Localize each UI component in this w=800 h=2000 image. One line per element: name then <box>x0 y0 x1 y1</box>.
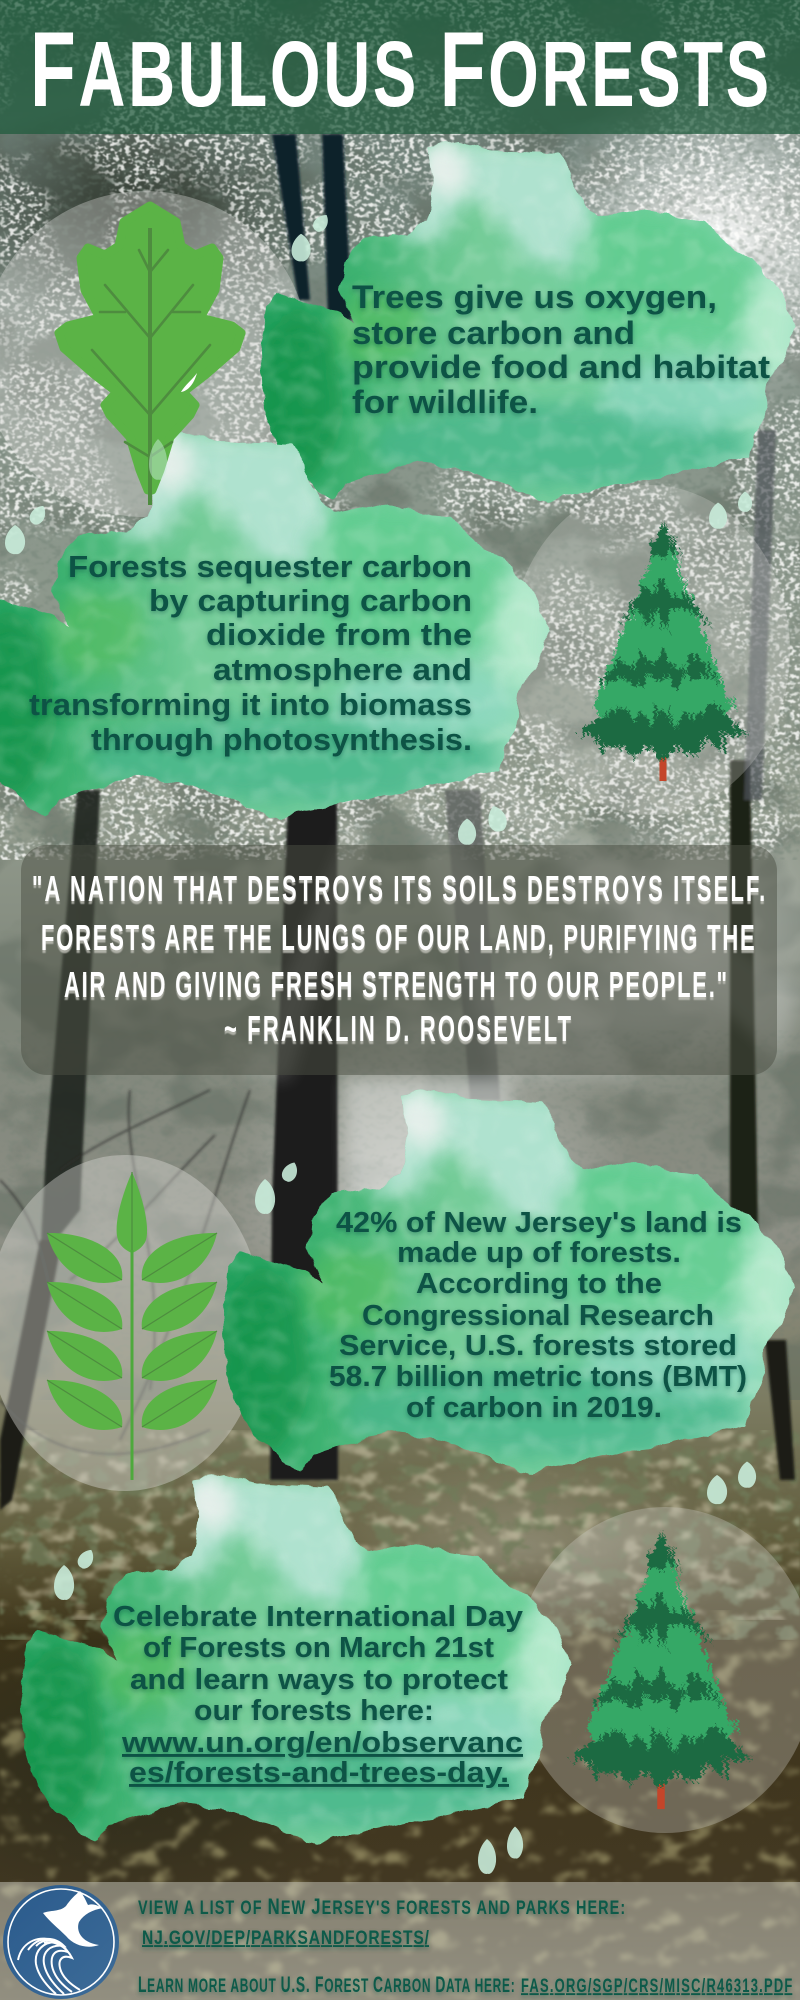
text block: new jersey forests: Service, U.S. forests stored <box>339 1330 737 1362</box>
quote text <box>32 870 765 1049</box>
text block: trees give us oxygen: Trees give us oxygen, <box>352 279 717 315</box>
icon: pine tree large <box>571 1532 751 1809</box>
text block: international day of forests: www.un.org/en/observanc <box>121 1727 523 1759</box>
icons: small falling leaves <box>5 211 756 1874</box>
text block: forests sequester carbon: transforming it into biomass <box>29 687 472 722</box>
text block: new jersey forests: 42% of New Jersey's land is <box>336 1207 742 1239</box>
icon: oak leaf <box>59 206 241 505</box>
icon: pine tree <box>579 522 747 781</box>
text block: new jersey forests: 58.7 billion metric tons (BMT) <box>329 1361 747 1393</box>
footer text: forest carbon data: FAS.ORG/SGP/CRS/MISC/R46313.PDF <box>521 1976 792 1997</box>
circle behind pine tree <box>510 485 790 815</box>
footer text: list of forests and parks <box>138 1895 625 1948</box>
text block: new jersey forests: Congressional Research <box>362 1300 714 1332</box>
circle behind ash leaf <box>0 1155 263 1491</box>
quote text: ~ FRANKLIN D. ROOSEVELT <box>224 1010 571 1049</box>
text block: trees give us oxygen: provide food and habitat <box>352 349 770 385</box>
text block: new jersey forests: of carbon in 2019. <box>406 1392 662 1424</box>
footer text: forest carbon data: LEARN MORE ABOUT U.S. FOREST CARBON DATA HERE: <box>138 1972 515 1997</box>
text block: trees give us oxygen <box>352 279 770 420</box>
icon: ash leaf <box>47 1172 217 1480</box>
text block: new jersey forests <box>329 1207 747 1424</box>
text block: international day of forests <box>113 1601 523 1789</box>
panel: quote background <box>21 845 777 1075</box>
text block: trees give us oxygen: store carbon and <box>352 315 635 351</box>
panel: watercolor blob 3 <box>211 1083 800 1483</box>
text block: forests sequester carbon: dioxide from the <box>206 617 472 652</box>
text block: international day of forests: es/forests-and-trees-day. <box>129 1757 509 1789</box>
footer text: list of forests and parks: VIEW A LIST OF NEW JERSEY'S FORESTS AND PARKS HERE: <box>138 1895 625 1920</box>
quote text: "A NATION THAT DESTROYS ITS SOILS DESTROYS ITSELF. <box>32 870 765 909</box>
title band <box>0 0 800 134</box>
text block: new jersey forests: According to the <box>416 1268 662 1300</box>
icon: NJDEP seal <box>3 1885 119 1999</box>
footer band <box>0 1882 800 2000</box>
text block: forests sequester carbon: Forests sequester carbon <box>68 549 472 584</box>
text block: new jersey forests: made up of forests. <box>397 1237 681 1269</box>
text block: international day of forests: our forests here: <box>194 1695 434 1727</box>
text block: international day of forests: Celebrate International Day <box>113 1601 523 1633</box>
text block: forests sequester carbon <box>29 549 472 757</box>
quote text: AIR AND GIVING FRESH STRENGTH TO OUR PEOPLE." <box>64 966 727 1005</box>
text block: forests sequester carbon: atmosphere and <box>213 652 472 687</box>
text block: international day of forests: of Forests on March 21st <box>143 1632 494 1664</box>
text block: forests sequester carbon: by capturing carbon <box>149 583 472 618</box>
circle behind oak leaf <box>0 191 309 517</box>
footer text: list of forests and parks: NJ.GOV/DEP/PARKSANDFORESTS/ <box>142 1927 429 1948</box>
title: FABULOUS FORESTS <box>30 9 769 129</box>
panel: watercolor blob 2 <box>0 424 566 828</box>
text block: forests sequester carbon: through photosynthesis. <box>91 722 472 757</box>
text block: trees give us oxygen: for wildlife. <box>352 384 538 420</box>
quote text: FORESTS ARE THE LUNGS OF OUR LAND, PURIFYING THE <box>41 919 755 958</box>
text block: international day of forests: and learn ways to protect <box>130 1664 508 1696</box>
circle behind second pine tree <box>515 1507 800 1833</box>
panel: watercolor blob 1 <box>250 135 800 510</box>
footer text: forest carbon data <box>138 1972 792 1997</box>
panel: watercolor blob 4 <box>10 1468 586 1852</box>
